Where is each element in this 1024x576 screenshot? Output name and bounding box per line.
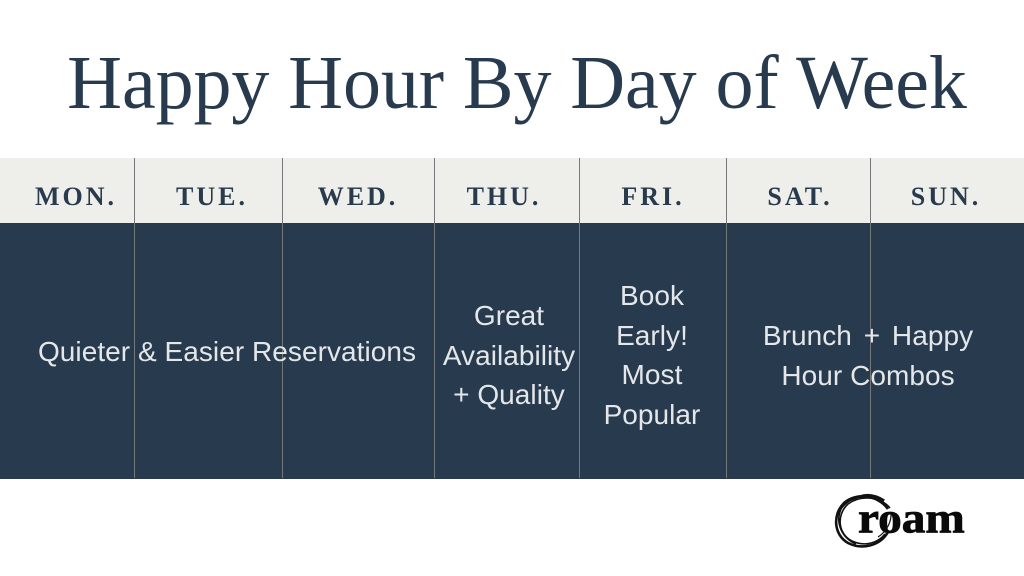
text: Friday: Early! [616, 320, 688, 350]
text: Thursday: + Quality [453, 379, 565, 410]
text: Friday [604, 280, 700, 430]
text: Thursday: Availability [443, 340, 575, 370]
text: Thursday [443, 300, 575, 410]
text: Saturday and Sunday: Hour Combos [781, 360, 955, 390]
text: Friday: Popular [604, 398, 700, 430]
title: Happy Hour By Day of Week [67, 41, 967, 125]
day: Sunday: SUN. [911, 182, 981, 211]
day: Wednesday: WED. [318, 182, 398, 211]
table body band [0, 223, 1024, 479]
day: Friday: FRI. [621, 182, 685, 211]
text: Friday: Most [622, 359, 682, 390]
text: Saturday and Sunday: Brunch + Happy [763, 320, 973, 351]
text: Monday to Wednesday: Quieter & Easier Reservations [38, 336, 416, 367]
table header band [0, 158, 1024, 223]
text: Friday: Book [620, 280, 684, 311]
day: Monday: MON. [35, 182, 117, 211]
day: Saturday: SAT. [767, 182, 833, 211]
day: Tuesday: TUE. [176, 182, 248, 211]
text: Thursday: Great [474, 300, 544, 331]
day: Thursday: THU. [467, 182, 541, 211]
logo: roam: roam [858, 494, 965, 542]
text: Saturday and Sunday [763, 320, 973, 390]
